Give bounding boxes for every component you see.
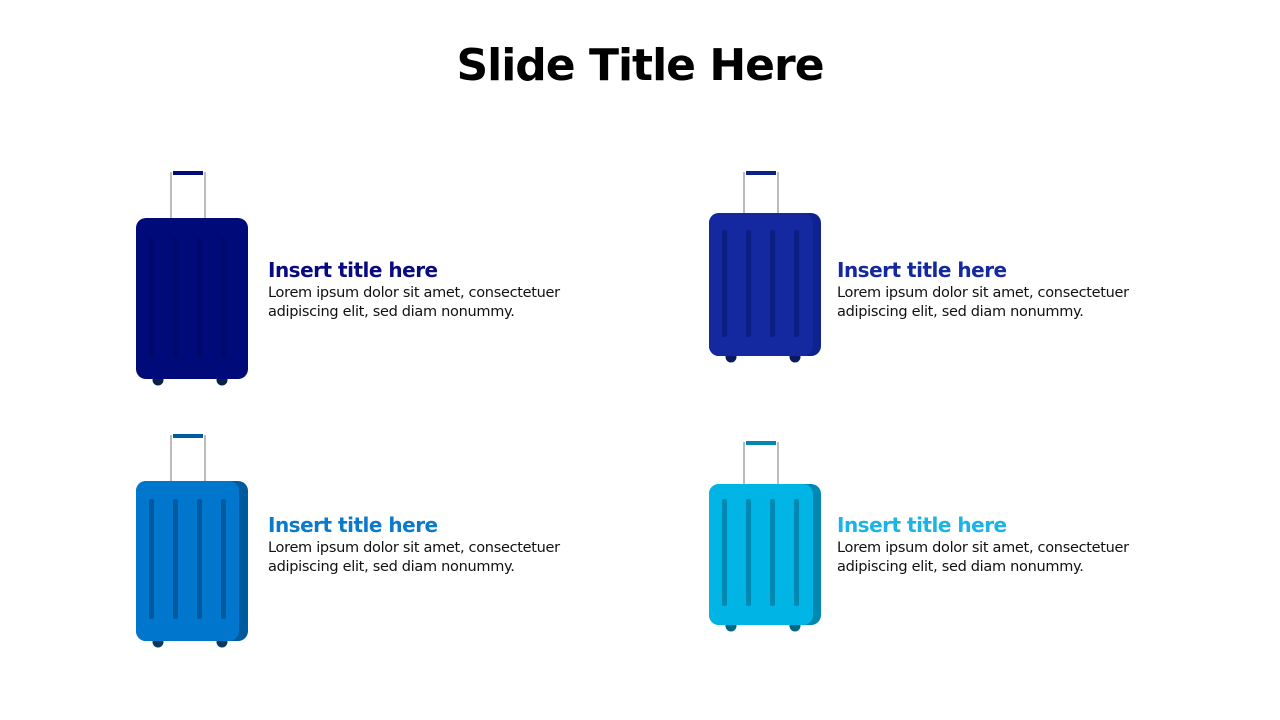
text block 1 bbox=[268, 258, 560, 320]
icon: suitcase 2 bbox=[709, 171, 821, 362]
icon: suitcase 4 bbox=[709, 441, 821, 632]
text block 4: Insert title here bbox=[837, 513, 1007, 537]
text block 1: Insert title here bbox=[268, 258, 438, 282]
text block 3 bbox=[268, 513, 560, 575]
text block 4: Lorem ipsum dolor sit amet, consectetuer adipiscing elit, sed diam nonummy. bbox=[837, 540, 1129, 575]
text block 4 bbox=[837, 513, 1130, 575]
icon: suitcase 1 bbox=[136, 171, 248, 386]
text block 2 bbox=[837, 258, 1130, 320]
title: Slide Title Here bbox=[456, 40, 824, 91]
text block 3: Lorem ipsum dolor sit amet, consectetuer adipiscing elit, sed diam nonummy. bbox=[268, 540, 560, 575]
text block 3: Insert title here bbox=[268, 513, 438, 537]
icon: suitcase 3 bbox=[136, 434, 248, 648]
text block 2: Lorem ipsum dolor sit amet, consectetuer adipiscing elit, sed diam nonummy. bbox=[837, 285, 1129, 320]
text block 1: Lorem ipsum dolor sit amet, consectetuer adipiscing elit, sed diam nonummy. bbox=[268, 285, 560, 320]
text block 2: Insert title here bbox=[837, 258, 1007, 282]
